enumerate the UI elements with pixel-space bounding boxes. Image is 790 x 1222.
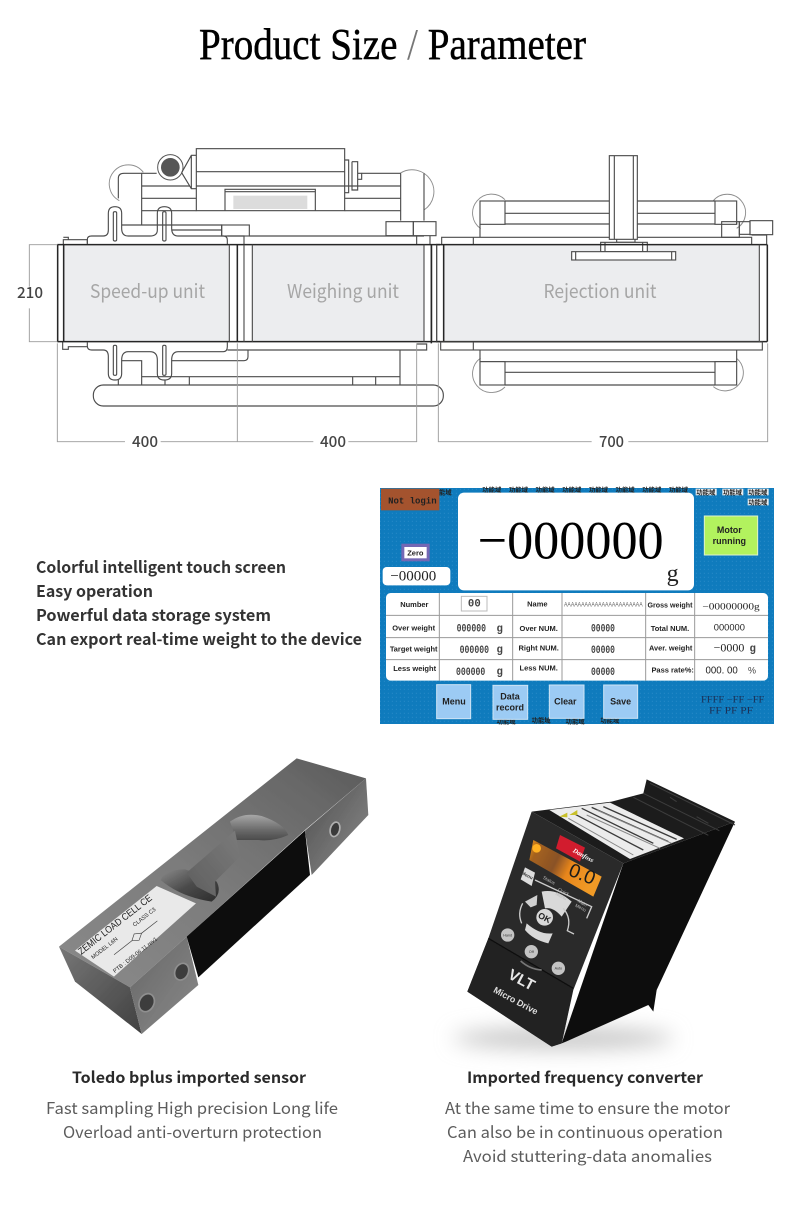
data table: g [749, 644, 756, 656]
drive text: Off [529, 950, 535, 954]
drive text: 0.0 [565, 860, 598, 890]
feature list: Can export real-time weight to the device [36, 626, 362, 650]
drive text: VLT [505, 966, 538, 995]
dimension numbers: 400 [132, 431, 158, 452]
feature list [36, 554, 362, 650]
bottom buttons: Save [610, 697, 631, 707]
data table: Pass rate%: [651, 666, 694, 675]
left drawing linework [29, 149, 443, 442]
drive text: Danfoss [571, 847, 595, 864]
converter caption: Avoid stuttering-data anomalies [463, 1143, 712, 1167]
function area labels: 功能域 [536, 485, 555, 494]
drive text: Status [542, 875, 557, 886]
motor running button: running [713, 536, 746, 546]
function area labels: 能域 [439, 487, 452, 496]
bottom buttons: record [496, 703, 524, 713]
data table: −0000 [714, 641, 744, 655]
feature list: Powerful data storage system [36, 602, 271, 626]
function area labels: 功能域 [589, 485, 609, 494]
data table: 000000 [456, 667, 485, 679]
motor running button: Motor [717, 525, 742, 535]
converter caption [445, 1066, 731, 1167]
sensor label: CLASS C3 [132, 907, 157, 928]
unit labels: Rejection unit [544, 277, 656, 304]
status code: FF PF PF [709, 705, 753, 715]
not login badge [381, 489, 439, 510]
data table: Aver. weight [649, 644, 693, 653]
drive text: Menu [555, 891, 568, 901]
main weight display: −000000 [478, 510, 664, 570]
drive text: Menu [574, 903, 587, 913]
sensor caption: Overload anti-overturn protection [63, 1119, 322, 1143]
converter caption: Can also be in continuous operation [447, 1119, 723, 1143]
data table: Number [400, 600, 429, 609]
unit labels: Speed-up unit [90, 277, 205, 304]
data table: Right NUM. [519, 644, 559, 653]
touch screen [380, 485, 774, 726]
data table: Gross weight [647, 601, 693, 610]
tare display: −00000 [390, 569, 436, 585]
function area labels: 功能域 [669, 485, 689, 494]
keypad [542, 891, 572, 917]
drive text: OK [536, 910, 553, 925]
data table: −00000000g [702, 602, 760, 613]
right drawing linework [431, 156, 773, 442]
data table: g [496, 645, 503, 657]
data table: Target weight [390, 644, 438, 653]
function area labels: 功能域 [532, 715, 551, 724]
dimension numbers: 400 [320, 431, 346, 452]
sensor caption: Toledo bplus imported sensor [72, 1066, 306, 1088]
function area labels: 功能域 [696, 487, 716, 496]
data table: 00000 [591, 645, 615, 657]
data table: Name [527, 600, 548, 609]
data table: Less weight [393, 664, 437, 673]
dimension drawing [17, 149, 773, 452]
status code: FFFF −FF −FF [701, 695, 764, 705]
data table: Over NUM. [520, 624, 558, 633]
feature list: Easy operation [36, 578, 153, 602]
dimension numbers: 700 [599, 431, 624, 452]
drive text: Micro Drive [492, 985, 540, 1017]
sensor caption [46, 1066, 338, 1143]
dark belt lines [57, 245, 440, 342]
data table: 000000 [457, 623, 486, 635]
bottom buttons: Menu [442, 697, 466, 707]
data table: 000000 [714, 623, 745, 633]
drive text: Hand [503, 933, 512, 937]
data table: g [496, 667, 503, 679]
dimension numbers [17, 282, 624, 452]
function area labels: 功能域 [497, 717, 516, 726]
function area labels: 功能域 [562, 485, 582, 494]
data table: % [748, 665, 756, 675]
status code [701, 695, 764, 715]
tare display [383, 567, 450, 585]
title: Product Size / Parameter [199, 20, 586, 69]
unit belts: gray fills [64, 245, 759, 342]
unit labels: Weighing unit [287, 277, 399, 304]
data table: 00000 [591, 623, 615, 635]
data table: Total NUM. [651, 624, 689, 633]
drive text: Auto [555, 967, 562, 971]
function area labels: 功能域 [600, 715, 620, 724]
motor running button [704, 516, 758, 555]
display [529, 840, 602, 897]
not login badge: Not login [388, 496, 437, 506]
drive text [492, 847, 598, 1017]
function area labels: 功能域 [723, 487, 743, 496]
function area labels [439, 485, 769, 726]
function area labels: 功能域 [566, 717, 585, 726]
drive text: Quick [557, 887, 571, 897]
sensor label: ZEMIC LOAD CELL CE [76, 893, 155, 957]
data table [386, 593, 768, 681]
function area labels: 功能域 [748, 497, 768, 506]
function area labels: 功能域 [642, 485, 662, 494]
data table: g [496, 623, 503, 635]
function area labels: 功能域 [616, 485, 635, 494]
function area labels: 功能域 [509, 485, 529, 494]
floor shadow [453, 1027, 673, 1050]
function area labels: 功能域 [748, 487, 768, 496]
feature list: Colorful intelligent touch screen [36, 554, 286, 578]
main weight display [458, 493, 694, 590]
dimension numbers: 210 [17, 282, 43, 303]
zero button: Zero [407, 549, 424, 558]
bottom buttons: Data [500, 692, 521, 702]
sensor label: PTB : D09-06.11 rev1 [112, 937, 159, 975]
data table: Over weight [392, 623, 436, 632]
unit labels [90, 277, 656, 304]
drive text: Main [577, 898, 588, 908]
dimension lines [29, 245, 417, 442]
data table: 000. 00 [706, 666, 738, 677]
data table: AAAAAAAAAAAAAAAAAAAAAAA [564, 603, 643, 609]
threaded holes [136, 821, 341, 1014]
main weight display: g [667, 561, 679, 587]
sensor label: MODEL L6N [91, 937, 119, 961]
sensor caption: Fast sampling High precision Long life [46, 1095, 338, 1119]
converter caption: Imported frequency converter [467, 1066, 703, 1088]
bottom buttons [437, 685, 638, 719]
converter caption: At the same time to ensure the motor [445, 1095, 731, 1119]
drive text: Menu [521, 870, 534, 881]
load cell photo [59, 758, 368, 1034]
data table: 000000 [460, 645, 489, 657]
data table: Less NUM. [520, 663, 558, 672]
data table: 00 [468, 598, 481, 610]
function area labels: 功能域 [482, 485, 502, 494]
zero button [401, 544, 430, 561]
data table: 00000 [591, 667, 615, 679]
frequency converter photo [453, 779, 735, 1050]
bottom buttons: Clear [554, 697, 577, 707]
sensor label [75, 886, 196, 984]
mirrored lower frame [87, 342, 227, 380]
